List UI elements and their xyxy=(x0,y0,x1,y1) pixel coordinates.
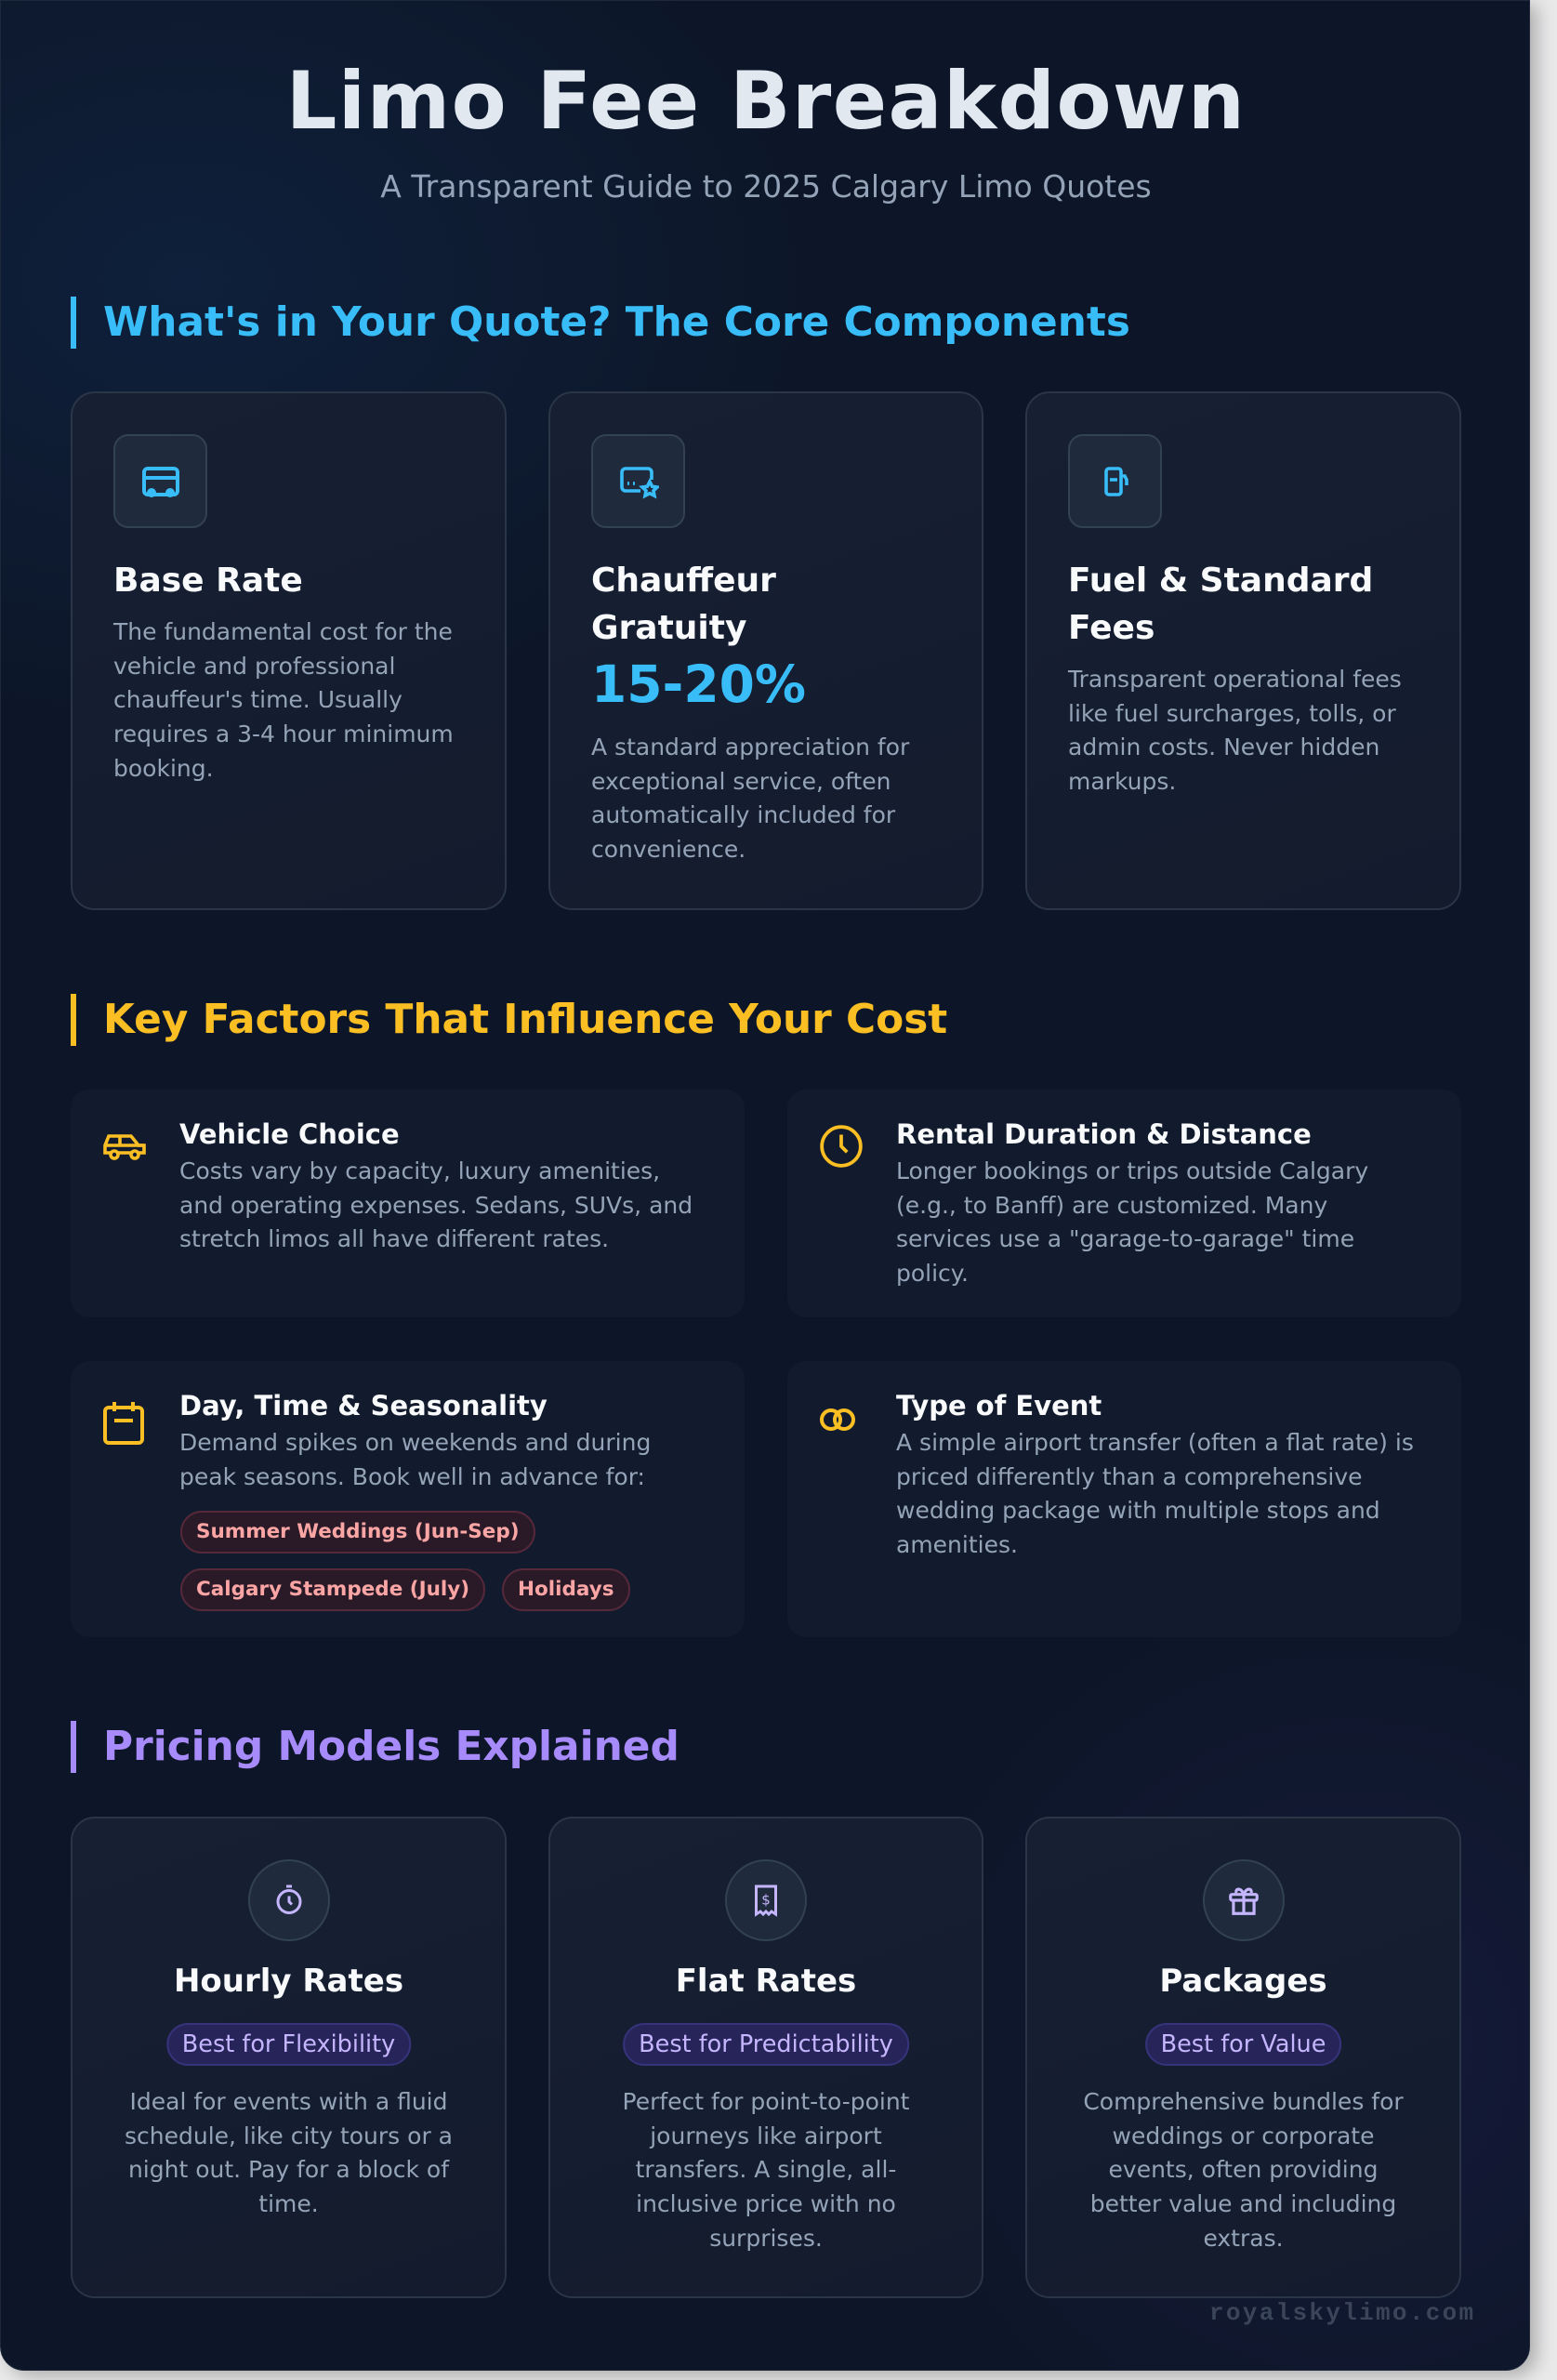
card text: Transparent operational fees like fuel surcharges, tolls, or admin costs. Never hidden markups. xyxy=(1068,666,1402,795)
factor title: Rental Duration & Distance xyxy=(896,1118,1312,1150)
tag: holidays xyxy=(502,1568,630,1611)
card text: The fundamental cost for the vehicle and professional chauffeur's time. Usually requires a 3-4 hour minimum booking. xyxy=(113,618,454,782)
card title: Base Rate xyxy=(113,562,303,600)
pricing title: Packages xyxy=(1159,1963,1327,2000)
icon: gift xyxy=(1203,1859,1285,1941)
stat: 15-20%: 15-20% xyxy=(591,654,806,714)
badge: Best for Flexibility xyxy=(182,2030,395,2058)
factor text: A simple airport transfer (often a flat rate) is priced differently than a comprehensive wedding package with multiple stops and amenities. xyxy=(896,1429,1414,1558)
card title: Fuel & Standard xyxy=(1068,562,1373,600)
panel: vehicle choice xyxy=(71,1090,745,1317)
pricing text: Comprehensive bundles for weddings or corporate events, often providing better value and including extras. xyxy=(1083,2088,1404,2252)
panel: base rate xyxy=(71,391,507,910)
tag: summer weddings xyxy=(180,1511,535,1554)
watermark: royalskylimo.com xyxy=(1209,2299,1475,2327)
pricing text: Perfect for point-to-point journeys like airport transfers. A single, all-inclusive price with no surprises. xyxy=(623,2088,909,2252)
pricing title: Hourly Rates xyxy=(174,1963,403,2000)
card title xyxy=(1068,562,1373,647)
icon: calendar xyxy=(103,1402,144,1445)
panel: chauffeur gratuity xyxy=(548,391,983,910)
icon: car xyxy=(103,1134,146,1160)
card text: A standard appreciation for exceptional service, often automatically included for convenience. xyxy=(591,734,909,863)
factor text xyxy=(179,1157,693,1252)
heading: core components: What's in Your Quote? The Core Components xyxy=(103,298,1130,346)
tags xyxy=(180,1511,630,1611)
heading: key factors: Key Factors That Influence Your Cost xyxy=(103,996,947,1043)
card title: Fees xyxy=(1068,609,1155,647)
icon: card xyxy=(113,434,207,528)
factor text: and operating expenses. Sedans, SUVs, and stretch limos all have different rates. xyxy=(179,1192,693,1252)
panel: hourly rates xyxy=(71,1817,507,2298)
icon: receipt xyxy=(725,1859,807,1941)
card title: Chauffeur xyxy=(591,562,776,600)
factor title: Day, Time & Seasonality xyxy=(179,1390,548,1421)
card title: Gratuity xyxy=(591,609,746,647)
icon: fuel xyxy=(1068,434,1162,528)
factor text: Demand spikes on weekends and during peak seasons. Book well in advance for: xyxy=(179,1429,651,1490)
panel: packages xyxy=(1025,1817,1461,2298)
icon: clock xyxy=(820,1125,863,1168)
subtitle: A Transparent Guide to 2025 Calgary Limo Quotes xyxy=(380,168,1152,205)
icon: receipt: $ xyxy=(761,1892,771,1909)
pricing title: Flat Rates xyxy=(676,1963,856,2000)
heading: pricing models: Pricing Models Explained xyxy=(103,1723,680,1770)
badge xyxy=(166,2023,411,2066)
pricing text: Ideal for events with a fluid schedule, like city tours or a night out. Pay for a block of time. xyxy=(125,2088,453,2217)
icon: stopwatch xyxy=(247,1859,329,1941)
factor title: Type of Event xyxy=(896,1390,1102,1421)
title: Limo Fee Breakdown xyxy=(286,55,1246,148)
panel: seasonality xyxy=(71,1361,745,1637)
card title xyxy=(591,562,776,647)
panel: rental duration xyxy=(787,1090,1461,1317)
factor text: Longer bookings or trips outside Calgary (e.g., to Banff) are customized. Many services use a "garage-to-garage" time policy. xyxy=(896,1157,1368,1287)
badge: Best for Value xyxy=(1161,2030,1326,2058)
panel: fuel fees xyxy=(1025,391,1461,910)
badge xyxy=(623,2023,909,2066)
badge: Best for Predictability xyxy=(639,2030,893,2058)
tag: summer weddings: Summer Weddings (Jun-Sep) xyxy=(196,1520,520,1543)
panel: flat rates xyxy=(548,1817,983,2298)
factor title: Vehicle Choice xyxy=(179,1118,400,1150)
icon: star card xyxy=(591,434,685,528)
panel: type of event xyxy=(787,1361,1461,1637)
tag: holidays: Holidays xyxy=(518,1578,614,1601)
badge xyxy=(1145,2023,1341,2066)
icon: rings xyxy=(820,1408,855,1431)
tag: stampede xyxy=(180,1568,485,1611)
factor text: Costs vary by capacity, luxury amenities, xyxy=(179,1157,660,1184)
tag: stampede: Calgary Stampede (July) xyxy=(196,1578,469,1601)
